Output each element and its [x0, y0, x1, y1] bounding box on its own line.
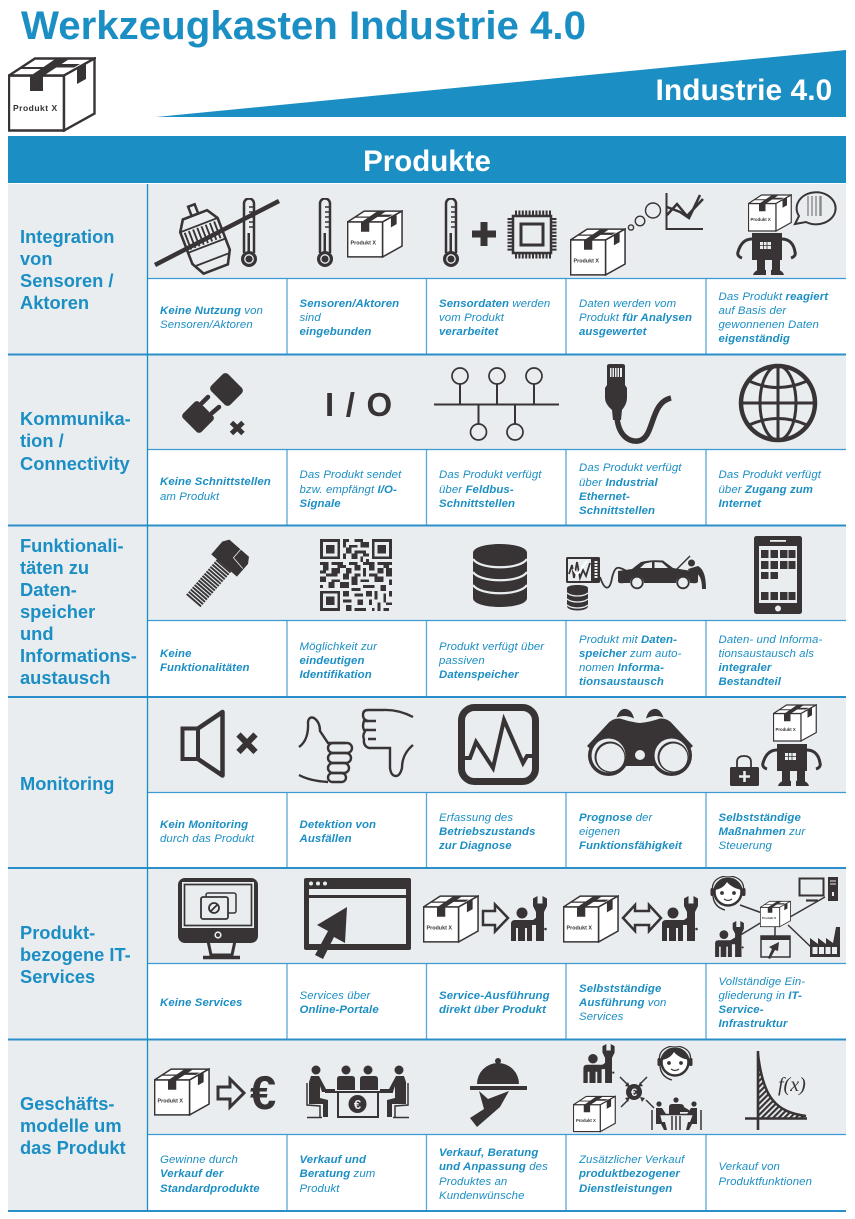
text cell: produktbezogener: [578, 1168, 680, 1180]
text cell: Ausfällen: [298, 833, 352, 845]
row heading: von: [20, 248, 53, 269]
text cell: eigenständig: [718, 333, 790, 345]
text cell: verarbeitet: [439, 326, 499, 338]
text cell: direkt über Produkt: [439, 1004, 547, 1016]
text cell: speicher zum auto-: [579, 648, 681, 660]
text cell: Funktionsfähigkeit: [579, 840, 683, 852]
text cell: gewonnenen Daten: [718, 319, 819, 331]
icon: additional services: €: [631, 1087, 637, 1099]
text cell: Verkauf von: [718, 1161, 780, 1173]
icon: Produkt X box: Produkt X: [13, 103, 58, 113]
text cell: Schnittstellen: [579, 505, 655, 517]
icon: box to euro: €: [250, 1066, 276, 1119]
icon: thermometer and box: [317, 198, 402, 267]
text cell: Produkt verfügt über: [439, 641, 545, 653]
text cell: Daten werden vom: [579, 298, 676, 310]
text cell: Produkt mit Daten-: [579, 634, 677, 646]
text cell: Möglichkeit zur: [300, 641, 378, 653]
text cell: Verkauf, Beratung: [439, 1147, 538, 1159]
icon: I / O: I / O: [325, 386, 393, 423]
text cell: Sensoren/Aktoren: [160, 319, 253, 331]
text cell: Ausführung von: [579, 997, 666, 1009]
text cell: Standardprodukte: [160, 1183, 260, 1195]
text cell: Dienstleistungen: [579, 1183, 672, 1195]
text cell: nomen Informa-: [579, 662, 664, 674]
text cell: Steuerung: [718, 840, 773, 852]
banner: Industrie 4.0 wedge: Industrie 4.0: [656, 74, 832, 107]
icon: box thinking about chart: [571, 193, 703, 275]
row heading: Funktionali-: [20, 535, 124, 556]
text cell: Erfassung des: [439, 812, 513, 824]
text cell: Selbstständige: [718, 812, 801, 824]
panel: Produktbezogene IT-Services: [20, 876, 840, 1030]
icon: Ethernet cable: [605, 364, 671, 441]
icon: box exchanging with worker: Produkt X: [566, 926, 592, 932]
text cell: Internet: [718, 498, 762, 510]
icon: f(x) curve: f(x): [778, 1074, 806, 1096]
row heading: Daten-: [20, 579, 77, 600]
icon: globe: [741, 366, 815, 440]
text cell: eigenen: [579, 826, 620, 838]
text cell: Daten- und Informa-: [718, 634, 822, 646]
text cell: integraler: [718, 662, 772, 674]
row heading: und: [20, 623, 54, 644]
text cell: ausgewertet: [579, 326, 648, 338]
text cell: Keine: [160, 648, 192, 660]
text cell: Kundenwünsche: [439, 1190, 525, 1202]
row heading: Aktoren: [20, 292, 89, 313]
icon: binoculars: [587, 709, 693, 776]
text cell: Das Produkt sendet: [300, 469, 402, 481]
heading band: Produkte: Produkte: [363, 145, 491, 178]
text cell: Keine Schnittstellen: [160, 476, 271, 488]
text cell: Keine Nutzung von: [160, 305, 263, 317]
icon: disconnected plug: [181, 371, 245, 434]
text cell: Services über: [300, 990, 372, 1002]
text cell: Online-Portale: [300, 1004, 379, 1016]
text cell: auf Basis der: [718, 305, 787, 317]
text cell: tionsaustausch: [579, 676, 664, 688]
text cell: über Industrial: [579, 477, 658, 489]
row heading: Produkt-: [20, 922, 95, 943]
icon: box to worker: [424, 896, 547, 942]
text cell: Gewinne durch: [160, 1154, 238, 1166]
text cell: Funktionalitäten: [160, 662, 250, 674]
text cell: eingebunden: [300, 326, 371, 338]
icon: sales meeting: €: [354, 1097, 361, 1112]
row heading: modelle um: [20, 1115, 122, 1136]
icon: monitoring display: [462, 708, 536, 782]
text cell: Datenspeicher: [439, 669, 519, 681]
title: Werkzeugkasten Industrie 4.0: [21, 4, 586, 48]
text cell: tionsaustausch als: [718, 648, 814, 660]
text cell: Beratung zum: [300, 1168, 375, 1180]
text cell: über Feldbus-: [439, 484, 514, 496]
panel: Geschäftsmodelle um das Produkt: [20, 1044, 812, 1202]
row heading: Integration: [20, 226, 114, 247]
icon: diagnosis car: [566, 556, 706, 610]
row heading: austausch: [20, 667, 110, 688]
row heading: das Produkt: [20, 1137, 126, 1158]
text cell: Prognose der: [579, 812, 652, 824]
row heading: tion /: [20, 430, 64, 451]
icon: thermometer and box: Produkt X: [350, 240, 376, 246]
banner: Industrie 4.0 wedge: [156, 50, 846, 117]
row heading: Geschäfts-: [20, 1093, 114, 1114]
icon: Produkt X box: [9, 58, 94, 130]
text cell: Keine Services: [160, 997, 242, 1009]
text cell: über Zugang zum: [718, 484, 813, 496]
text cell: sind: [300, 312, 321, 324]
icon: serving cloche: [470, 1058, 527, 1127]
icon: crossed-out motor and thermometer: [155, 198, 279, 276]
text cell: Das Produkt verfügt: [439, 469, 542, 481]
text cell: zur Diagnose: [438, 840, 512, 852]
text cell: Service-: [718, 1004, 764, 1016]
text cell: am Produkt: [160, 491, 220, 503]
icon: service network: [710, 876, 840, 959]
text cell: Services: [579, 1011, 624, 1023]
icon: robot with first-aid bag: Produkt X: [776, 727, 796, 732]
text cell: Produktes an: [439, 1176, 507, 1188]
row heading: Informations-: [20, 645, 137, 666]
text cell: eindeutigen: [300, 655, 365, 667]
panel: Monitoring: [20, 705, 820, 852]
text cell: Vollständige Ein-: [718, 976, 805, 988]
text cell: Das Produkt verfügt: [718, 469, 822, 481]
icon: box to euro: Produkt X: [158, 1098, 183, 1104]
icon: QR code: [320, 539, 392, 611]
text cell: Produktfunktionen: [718, 1176, 812, 1188]
text cell: Das Produkt verfügt: [579, 462, 682, 474]
icon: fieldbus: [434, 368, 559, 440]
icon: desktop monitor: [178, 878, 258, 958]
icon: box thinking about chart: Produkt X: [574, 258, 599, 264]
icon: service network: Produkt X: [762, 916, 776, 920]
panel: Integration von Sensoren / Aktoren: [20, 192, 836, 345]
text cell: Detektion von: [300, 819, 376, 831]
row heading: Kommunika-: [20, 408, 131, 429]
panel: Kommunikation / Connectivity: [20, 364, 822, 517]
heading band: Produkte: [8, 136, 846, 183]
text cell: Zusätzlicher Verkauf: [578, 1154, 686, 1166]
text cell: Sensoren/Aktoren: [300, 298, 399, 310]
text cell: Identifikation: [300, 669, 372, 681]
icon: robot with speech bubble: Produkt X: [750, 217, 771, 222]
text cell: gliederung in IT-: [718, 990, 802, 1002]
icon: database: [473, 544, 527, 607]
icon: robot with speech bubble: [738, 192, 836, 275]
text cell: vom Produkt: [439, 312, 505, 324]
text cell: Service-Ausführung: [439, 990, 550, 1002]
icon: f(x) curve: [745, 1051, 807, 1130]
icon: thumbs up and down: [299, 710, 413, 782]
text cell: Bestandteil: [718, 676, 782, 688]
icon: browser window with cursor: [304, 878, 411, 959]
text cell: Verkauf der: [160, 1168, 224, 1180]
text cell: Ethernet-: [579, 491, 630, 503]
text cell: bzw. empfängt I/O-: [300, 484, 397, 496]
text cell: Schnittstellen: [439, 498, 515, 510]
row heading: speicher: [20, 601, 95, 622]
text cell: Verkauf und: [300, 1154, 367, 1166]
icon: robot with first-aid bag: [730, 705, 820, 786]
text cell: Betriebszustands: [439, 826, 536, 838]
row heading: Connectivity: [20, 453, 131, 474]
icon: thermometer plus chip: [443, 198, 554, 267]
icon: sales meeting: [307, 1066, 409, 1118]
row heading: Services: [20, 966, 95, 987]
icon: box to euro: [155, 1066, 276, 1119]
icon: screw: [180, 537, 252, 613]
text cell: und Anpassung des: [439, 1161, 548, 1173]
text cell: durch das Produkt: [160, 833, 255, 845]
icon: muted speaker: [182, 712, 256, 776]
text cell: Infrastruktur: [718, 1018, 788, 1030]
row heading: täten zu: [20, 557, 89, 578]
row heading: Monitoring: [20, 773, 114, 794]
icon: additional services: [573, 1044, 701, 1132]
text cell: Signale: [300, 498, 341, 510]
text cell: Das Produkt reagiert: [718, 291, 828, 303]
row heading: Sensoren /: [20, 270, 113, 291]
text cell: Selbstständige: [579, 983, 662, 995]
text cell: passiven: [438, 655, 485, 667]
icon: box exchanging with worker: [564, 896, 698, 942]
text cell: Produkt: [300, 1183, 340, 1195]
row heading: bezogene IT-: [20, 944, 131, 965]
text cell: Produkt für Analysen: [579, 312, 692, 324]
panel: Funktionalitäten zu Datenspeicherung und Informationsaustausch: [20, 535, 822, 688]
text cell: Maßnahmen zur: [718, 826, 805, 838]
icon: smartphone: [754, 536, 802, 614]
icon: box to worker: Produkt X: [426, 926, 452, 932]
text cell: Sensordaten werden: [439, 298, 550, 310]
icon: additional services: Produkt X: [576, 1118, 596, 1123]
text cell: Kein Monitoring: [160, 819, 248, 831]
